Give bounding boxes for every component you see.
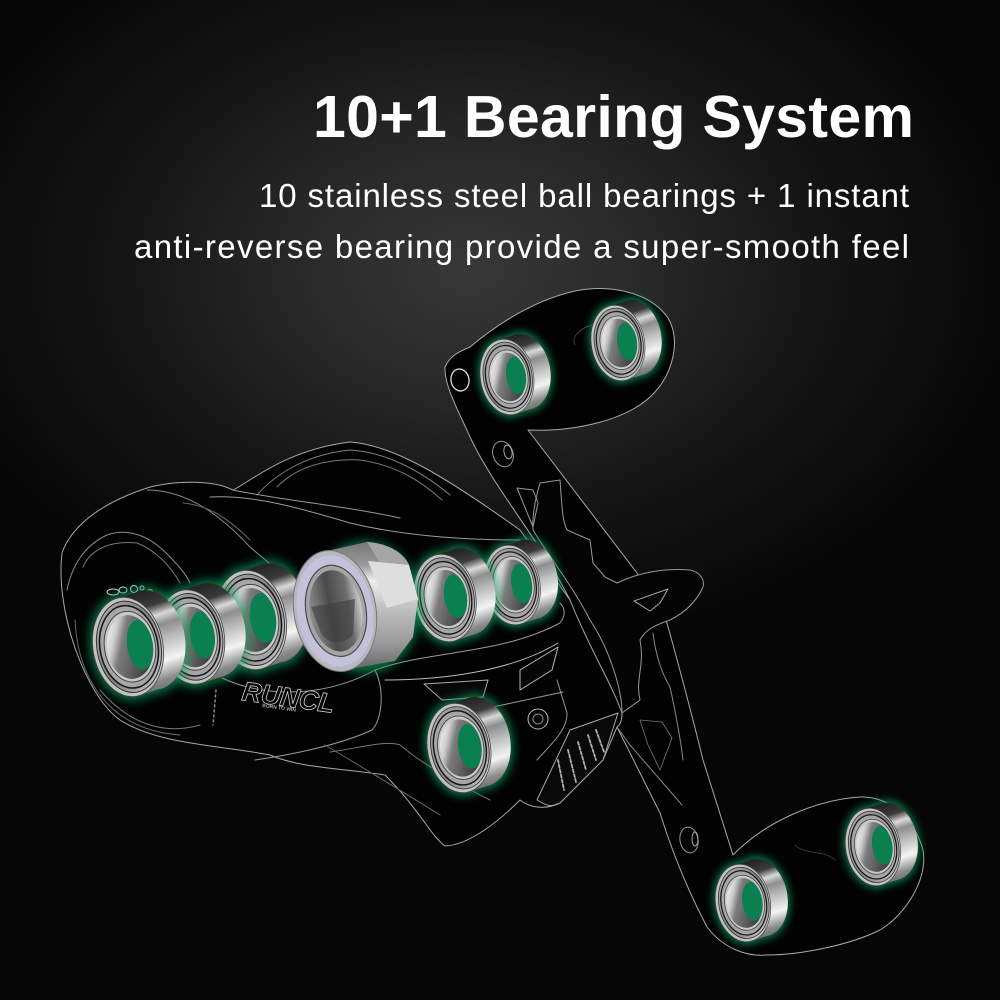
spool dial marks: [107, 586, 216, 725]
anti-reverse bearing: centre hex nut: [284, 541, 421, 678]
description text: anti-reverse bearing provide a super-smooth feel: [134, 228, 909, 265]
handle nut and wing: [533, 480, 703, 713]
bearing: handle knob bottom right: [836, 795, 927, 894]
bearing: row second: [147, 574, 256, 694]
reel handle arm and knobs: [445, 289, 924, 955]
bearing: handle knob top right: [582, 292, 670, 388]
bearing: handle knob bottom left: [706, 851, 797, 950]
reel body: [61, 442, 622, 846]
fishing reel line drawing: BORN TO WIN: [262, 703, 297, 714]
bearing: lower body: [417, 688, 521, 802]
bearing: row third: [204, 553, 320, 680]
title: 10+1 Bearing System: [313, 84, 914, 150]
bearing: row first large: [81, 580, 197, 707]
bearing: row fifth: [404, 539, 506, 651]
description text: 10 stainless steel ball bearings + 1 instant: [259, 177, 909, 214]
reel logo: RUNCL: [240, 676, 336, 719]
bearing: row sixth: [475, 532, 567, 633]
description text: [134, 177, 909, 265]
bearing: handle knob top left: [471, 326, 559, 422]
fishing reel line drawing: [61, 289, 924, 955]
